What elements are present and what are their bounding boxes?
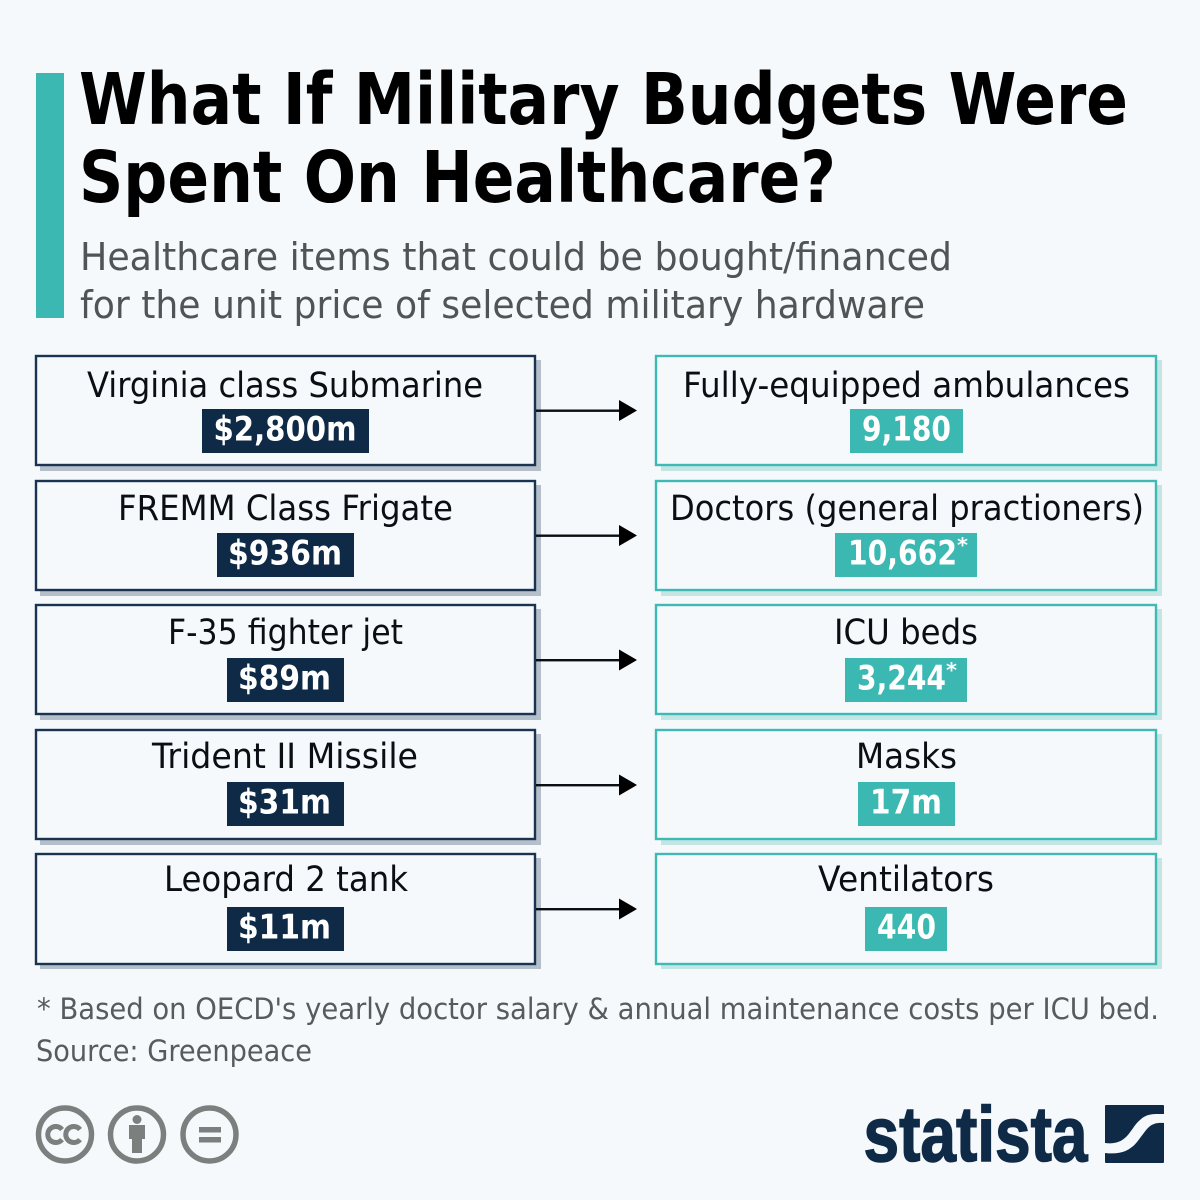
panel: Trident II Missile xyxy=(36,730,541,845)
panel: Masks: 17m xyxy=(870,782,942,822)
panel: Trident II Missile: Trident II Missile xyxy=(151,737,418,777)
panel: Virginia class Submarine: Virginia class Submarine xyxy=(87,366,483,406)
panel: F-35 fighter jet: $89m xyxy=(238,658,331,698)
panel: Trident II Missile: $31m xyxy=(238,782,331,822)
panel: F-35 fighter jet xyxy=(36,605,541,720)
panel: Virginia class Submarine: $2,800m xyxy=(214,410,356,448)
panel: Ventilators: 440 xyxy=(877,908,936,946)
subtitle xyxy=(80,235,952,328)
panel: Fully-equipped ambulances: Fully-equipped ambulances xyxy=(683,366,1130,406)
panel: Masks xyxy=(656,730,1162,845)
arrow: submarine to ambulances xyxy=(536,400,637,421)
panel: FREMM Class Frigate xyxy=(36,481,541,596)
icon: attribution xyxy=(110,1108,164,1161)
panel: F-35 fighter jet: F-35 fighter jet xyxy=(168,613,403,653)
panel: Leopard 2 tank: $11m xyxy=(238,908,331,946)
logo: statista: statista xyxy=(864,1090,1088,1178)
subtitle: for the unit price of selected military hardware xyxy=(80,283,925,328)
title xyxy=(79,58,1128,219)
icon: creative commons xyxy=(38,1108,92,1161)
panel: Ventilators: Ventilators xyxy=(818,860,994,900)
panel: FREMM Class Frigate: $936m xyxy=(228,534,342,572)
arrow: tank to ventilators xyxy=(536,898,637,920)
panel: Doctors xyxy=(656,481,1162,596)
panel: ICU beds: ICU beds xyxy=(834,613,978,653)
source: Source: Greenpeace xyxy=(36,1034,312,1068)
panel: Masks: Masks xyxy=(856,737,957,777)
panel: Fully-equipped ambulances xyxy=(656,356,1162,471)
panel: Doctors: Doctors (general practioners) xyxy=(670,489,1144,529)
panel: ICU beds: * xyxy=(946,658,958,682)
arrow: missile to masks xyxy=(536,774,637,796)
panel: FREMM Class Frigate: FREMM Class Frigate xyxy=(118,489,453,529)
footnote: * Based on OECD's yearly doctor salary & annual maintenance costs per ICU bed. xyxy=(37,992,1159,1026)
panel: Virginia class Submarine xyxy=(36,356,541,471)
panel: Fully-equipped ambulances: 9,180 xyxy=(862,410,951,448)
panel: Doctors: 10,662 xyxy=(848,534,957,572)
subtitle: Healthcare items that could be bought/financed xyxy=(80,235,952,280)
icon: no derivatives xyxy=(183,1108,236,1161)
panel: ICU beds xyxy=(656,605,1162,720)
title: Spent On Healthcare? xyxy=(79,136,836,219)
panel: Doctors: * xyxy=(957,533,969,557)
panel: ICU beds: 3,244 xyxy=(857,658,946,698)
panel: Leopard 2 tank xyxy=(36,854,541,969)
arrow: jet to ICU beds xyxy=(536,650,637,670)
panel: Leopard 2 tank: Leopard 2 tank xyxy=(164,860,408,900)
accent bar xyxy=(36,73,64,318)
arrow: frigate to doctors xyxy=(536,525,637,546)
panel: Ventilators xyxy=(656,854,1162,969)
